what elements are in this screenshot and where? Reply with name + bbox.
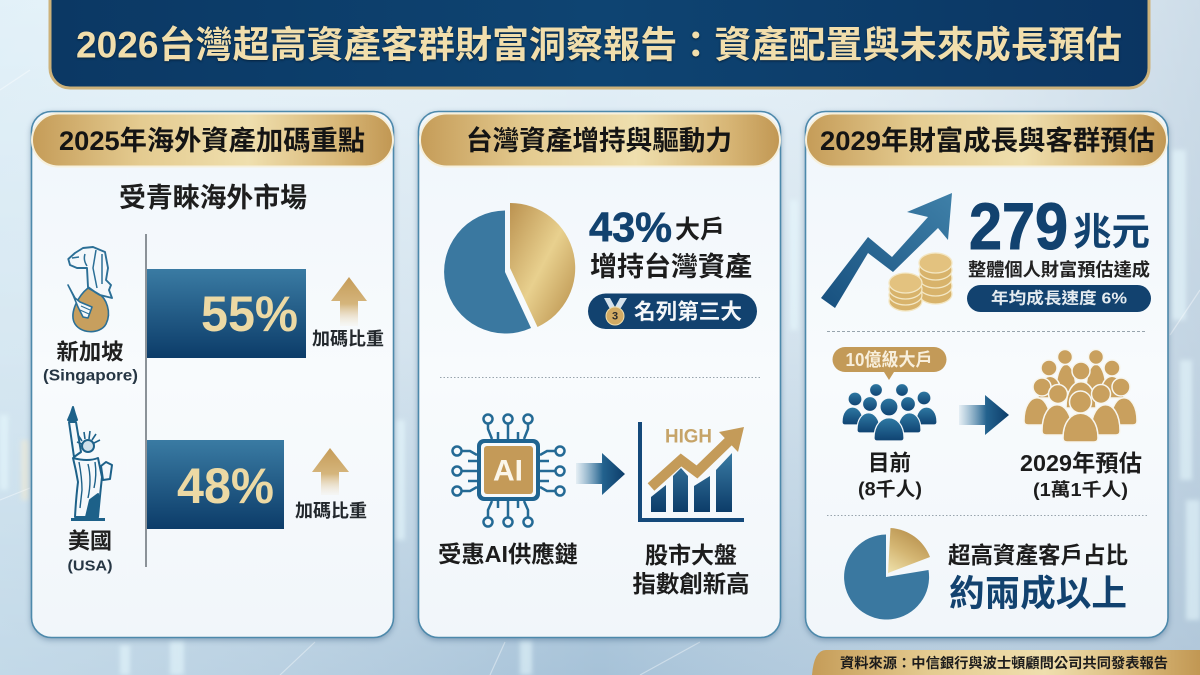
label: Singapore [43,340,138,384]
bar: USA 48% [147,440,284,529]
arrow: AI to market [576,453,625,495]
label: current: (8千人) [858,478,922,500]
label: 2029 forecast: 2029年預估 [1020,450,1142,476]
icon: medal: 3 [612,310,618,322]
icon: merlion [68,247,112,332]
stat: over twenty percent [948,542,1128,614]
source footer [812,650,1200,675]
arrow: Singapore overweight [312,277,384,349]
chart icon: market high: HIGH [665,426,712,448]
panel heading: 2029 forecast: 2029年財富成長與客群預估 [820,125,1155,156]
arrow: USA overweight: 加碼比重 [295,501,367,521]
label: market index high: 指數創新高 [632,571,750,597]
source footer: 資料來源：中信銀行與波士頓顧問公司共同發表報告 [840,655,1168,671]
icon: medal [604,298,627,325]
panel heading: 2029 forecast [806,114,1167,166]
arrow: Singapore overweight: 加碼比重 [312,329,384,349]
stat: 279 trillion: 兆元 [1073,212,1150,254]
callout: billionaire tag [832,347,946,380]
label: Singapore: (Singapore) [43,368,138,384]
title: 2026台灣超高資產客群財富洞察報告：資產配置與未來成長預估 [76,24,1122,66]
title banner [50,0,1149,88]
stat: 279 trillion: 279 [969,189,1068,263]
panel heading: Taiwan assets [420,114,780,166]
label: Singapore: 新加坡 [56,340,124,364]
panel: 2025 overseas assets [32,112,394,638]
bar: Singapore 55%: 55% [201,286,298,342]
icon: current group [842,384,937,441]
icon: AI chip: AI [493,454,523,488]
pie chart: 43 percent [444,203,575,333]
pie chart: high-asset share [844,528,930,619]
stat: 43 percent increased Taiwan holdings [589,204,752,282]
icon: statue of liberty [68,407,112,521]
label: USA: 美國 [68,528,112,554]
arrow: group growth [959,395,1009,435]
icon: AI chip [452,414,564,526]
bar: Singapore 55% [147,269,306,358]
stat: 43 percent increased Taiwan holdings: 增持台灣資產 [590,251,752,282]
badge: ranked third [588,294,757,329]
label: AI supply chain: 受惠AI供應鏈 [438,541,578,567]
bar: USA 48%: 48% [177,458,274,514]
stat: 279 trillion [969,189,1150,263]
chart icon: market high [640,422,744,520]
panel: Taiwan assets [418,112,780,638]
arrow: USA overweight [295,448,367,521]
label: current: 目前 [868,450,911,476]
panel heading: Taiwan assets: 台灣資產增持與驅動力 [466,125,732,156]
icon: growth arrow with coins [821,193,952,311]
label: market index high [632,542,750,597]
badge: annual growth [967,285,1151,312]
label: 2029 forecast [1020,450,1142,500]
panel heading: overseas assets [32,114,393,166]
subheading: favored markets: 受青睞海外市場 [119,183,307,213]
label: USA: (USA) [68,558,112,574]
label: overall personal wealth: 整體個人財富預估達成 [968,259,1150,280]
stat: 43 percent increased Taiwan holdings: 43% [589,204,672,250]
stat: over twenty percent: 約兩成以上 [949,572,1127,614]
badge: annual growth: 年均成長速度 6% [991,288,1127,308]
label: 2029 forecast: (1萬1千人) [1033,480,1128,500]
panel: 2029 forecast [806,112,1168,638]
label: market index high: 股市大盤 [645,542,737,568]
callout: billionaire tag: 10億級大戶 [846,349,932,370]
label: current [858,450,922,500]
bar chart axis [145,234,147,567]
stat: 43 percent increased Taiwan holdings: 大戶 [675,216,725,244]
icon: 2029 group [1024,350,1137,442]
stat: over twenty percent: 超高資產客戶占比 [948,542,1128,568]
panel heading: overseas assets: 2025年海外資產加碼重點 [59,126,365,156]
badge: ranked third: 名列第三大 [634,300,742,324]
label: USA [68,528,112,574]
